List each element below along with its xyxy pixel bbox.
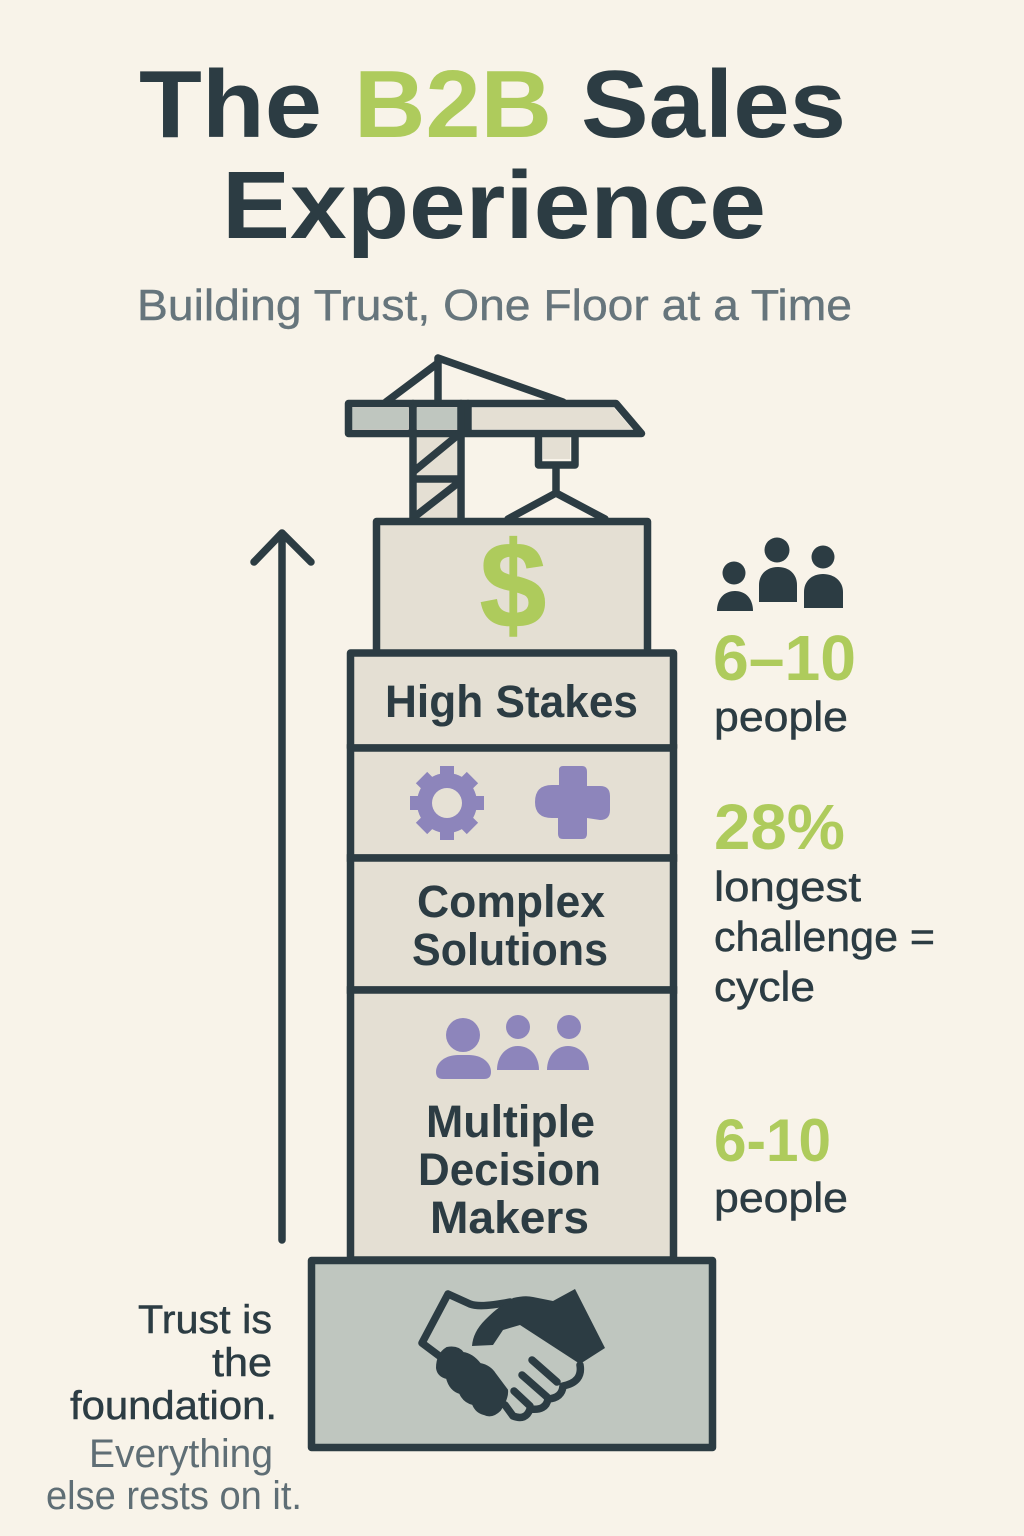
icon: puzzle cross (535, 766, 610, 839)
stat: 6–10 people: people (714, 693, 848, 740)
title (139, 51, 846, 259)
label: complex solutions (412, 876, 608, 975)
panel: high stakes floor (350, 653, 674, 748)
subtitle: Building Trust, One Floor at a Time (137, 281, 852, 330)
label: multiple decision makers: Multiple (426, 1096, 595, 1147)
icon: handshake (422, 1289, 605, 1417)
panel: foundation (312, 1260, 712, 1448)
icon: gear (410, 766, 484, 840)
title: B2B (354, 51, 552, 158)
title: Experience (222, 152, 766, 259)
label: complex solutions: Complex (417, 876, 605, 927)
panel: multiple decision makers floor (350, 990, 674, 1260)
label: high stakes: High Stakes (385, 676, 638, 727)
text block: trust is the foundation: Trust is (138, 1298, 272, 1342)
text block: trust is the foundation (46, 1298, 302, 1518)
panel: icons floor (350, 748, 674, 858)
stat: 6-10 people: 6-10 (714, 1107, 831, 1174)
label: complex solutions: Solutions (412, 924, 608, 975)
arrow: upward progress (254, 533, 311, 1240)
icon: dollar sign: $ (480, 517, 546, 653)
label: multiple decision makers (418, 1096, 601, 1243)
panel: top floor with dollar sign (376, 517, 648, 654)
text block: trust is the foundation: else rests on it. (46, 1474, 302, 1518)
stat: 28% longest challenge = cycle: challenge = (714, 913, 935, 960)
icon: crane (348, 358, 642, 520)
stat: 6-10 people (714, 1107, 848, 1221)
text block: trust is the foundation: the (212, 1341, 272, 1385)
title: The (139, 51, 322, 158)
title: Sales (581, 51, 846, 158)
stat: 28% longest challenge = cycle: 28% (714, 791, 845, 863)
stat: 6-10 people: people (714, 1174, 848, 1221)
stat: 28% longest challenge = cycle: longest (714, 863, 861, 910)
stat: 28% longest challenge = cycle (714, 791, 935, 1010)
stat: 28% longest challenge = cycle: cycle (714, 963, 815, 1010)
panel: complex solutions floor (350, 858, 674, 990)
stat: 6–10 people (713, 622, 856, 740)
icon: dark people (717, 538, 843, 611)
label: multiple decision makers: Makers (430, 1192, 589, 1243)
stat: 6–10 people: 6–10 (713, 622, 856, 694)
label: multiple decision makers: Decision (418, 1144, 601, 1195)
text block: trust is the foundation: Everything (89, 1432, 273, 1476)
text block: trust is the foundation: foundation. (70, 1384, 277, 1428)
icon: purple people (436, 1015, 589, 1079)
